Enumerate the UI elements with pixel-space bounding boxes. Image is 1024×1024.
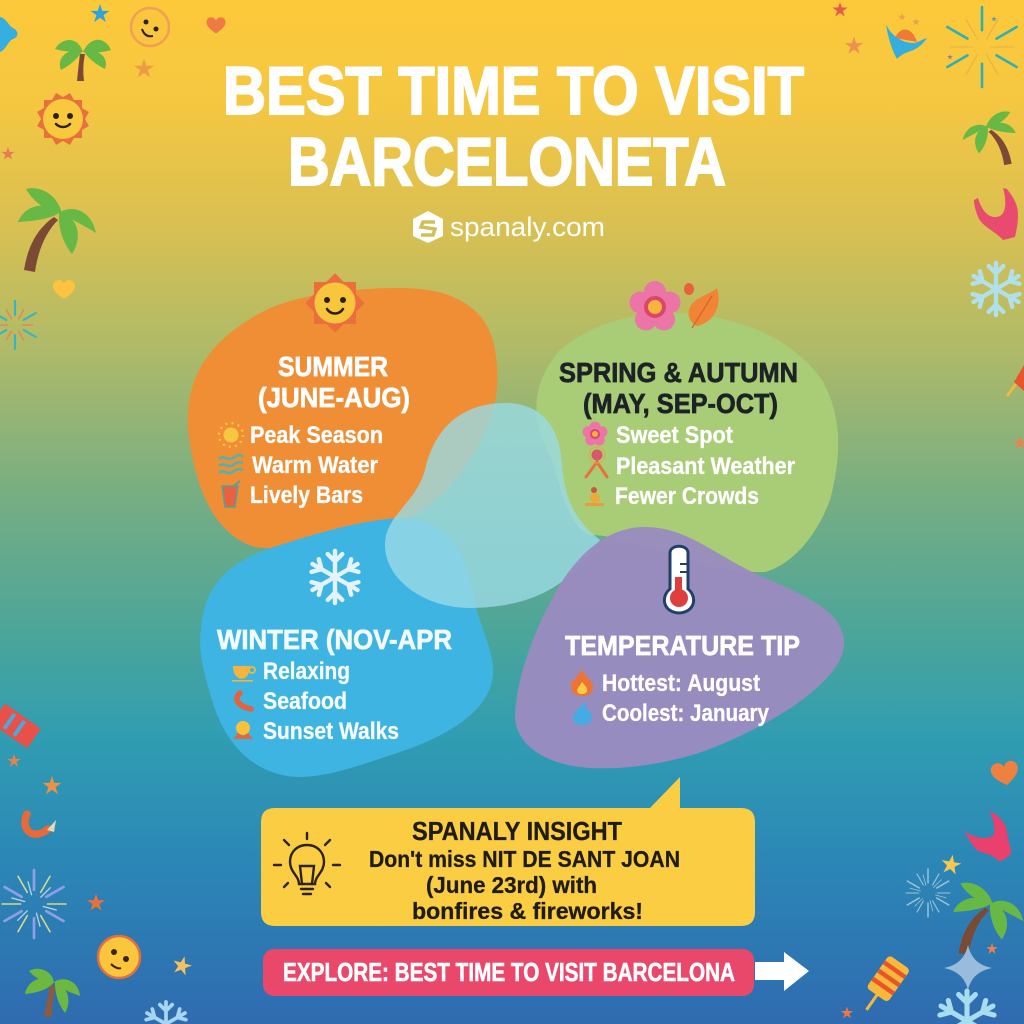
insight text [369,816,680,924]
icon: small star [986,943,998,954]
icon: orange heart [206,17,226,34]
icon: summer sun [305,273,365,333]
icon: corner snowflake [937,991,997,1024]
insight text: bonfires & fireworks! [412,898,643,924]
icon: small star [7,754,21,767]
decorations: bottom left [0,704,194,1024]
icon: cool drop [573,702,592,725]
winter list: Relaxing [263,658,350,685]
temperature list [602,670,770,727]
icon: teal firework [0,301,36,349]
title: BEST TIME TO VISIT [223,53,804,129]
spring list: Fewer Crowds [615,483,759,510]
icon: sunset [233,721,253,739]
icon: flame [571,669,593,696]
spring list [615,422,795,510]
icon: small sun [219,423,243,447]
icon: pale snowflake [970,263,1022,315]
temperature list: Hottest: August [602,670,760,697]
decorations: top right [832,2,1024,449]
decorations: bottom right [841,760,1023,1024]
panel: winter [200,518,493,777]
decorations: top left [0,4,226,349]
icon: sparkle diamond [944,945,992,990]
icon: coral star [1,147,15,160]
title: BARCELONETA [288,124,726,200]
icon: coffee cup [232,666,255,682]
summer list: Peak Season [250,422,383,449]
summer list [250,422,383,509]
icon: yellow heart [53,280,75,299]
icon: meditating person [585,487,604,506]
icon: small flower [582,422,608,446]
icon: big firework [942,5,1022,89]
icon: large palm [18,188,96,272]
button: explore: EXPLORE: BEST TIME TO VISIT BARCELONA [283,957,735,987]
icon: bottom snowflake [144,1002,188,1024]
winter list: Sunset Walks [263,718,399,745]
icon: flower [630,281,680,330]
summer heading: (JUNE-AUG) [258,382,410,413]
icon: shrimp [25,814,56,834]
icon: swimwear with sun [886,13,927,59]
temperature heading: TEMPERATURE TIP [565,630,800,661]
icon: star [87,894,105,911]
icon: popsicle at edge [1007,365,1024,396]
icon: yellow star [171,954,194,976]
icon: pink swimsuit [974,188,1018,240]
summer heading [258,351,410,413]
summer list: Lively Bars [250,482,363,509]
icon: orange heart [990,760,1020,787]
temperature list: Coolest: January [602,700,770,727]
icon: firecracker [0,704,41,748]
icon: ringed smiley [131,8,169,46]
icon: orange star [134,58,154,77]
spring heading [559,357,798,419]
icon: star [42,776,62,794]
spring list: Pleasant Weather [616,453,795,480]
panel: spring and autumn [536,281,838,572]
spring heading: (MAY, SEP-OCT) [583,388,778,419]
icon: right palm [963,111,1016,165]
winter heading: WINTER (NOV-APR [217,624,452,655]
panel: temperature tip [515,527,844,768]
button: explore [263,949,754,996]
icon: pale firework [900,864,956,922]
summer list: Warm Water [252,452,378,479]
winter list: Seafood [263,688,347,715]
summer heading: SUMMER [278,351,388,382]
insight text: (June 23rd) with [426,872,597,898]
spring heading: SPRING & AUTUMN [559,357,798,388]
insight text: Don't miss NIT DE SANT JOAN [369,846,680,872]
icon: bottom palm [25,969,80,1017]
insight text: SPANALY INSIGHT [412,816,622,846]
icon: orange star [845,36,863,54]
spring list: Sweet Spot [616,422,733,449]
callout: spanaly insight [261,777,755,926]
icon: light bulb [274,833,340,894]
icon: blue splash [0,17,18,52]
light translucent blob [385,403,600,608]
icon: walker [586,447,607,477]
icon: drink [222,481,240,507]
icon: edge star [1013,436,1024,449]
icon: thermometer [664,546,694,613]
icon: waves [219,455,243,473]
icon: right bottom palm [953,883,1023,955]
title [223,53,804,200]
icon: smiley [98,936,140,978]
winter list [263,658,399,745]
icon: smiling sun [37,93,89,145]
icon: prawn [237,693,251,709]
panel: summer [188,273,497,549]
icon: pink swimsuit [964,810,1011,861]
icon: red star [832,2,848,16]
logo: spanaly.com: spanaly.com [450,212,605,242]
icon: blue star [90,4,110,22]
icon: autumn leaf [684,283,719,328]
icon: blue firework [0,862,74,946]
icon: small star [841,1006,853,1018]
icon: small palm [55,40,111,81]
icon: popsicle [856,955,910,1017]
arrow [755,952,809,991]
icon: yellow star [940,853,963,875]
icon: large snowflake [309,551,361,603]
